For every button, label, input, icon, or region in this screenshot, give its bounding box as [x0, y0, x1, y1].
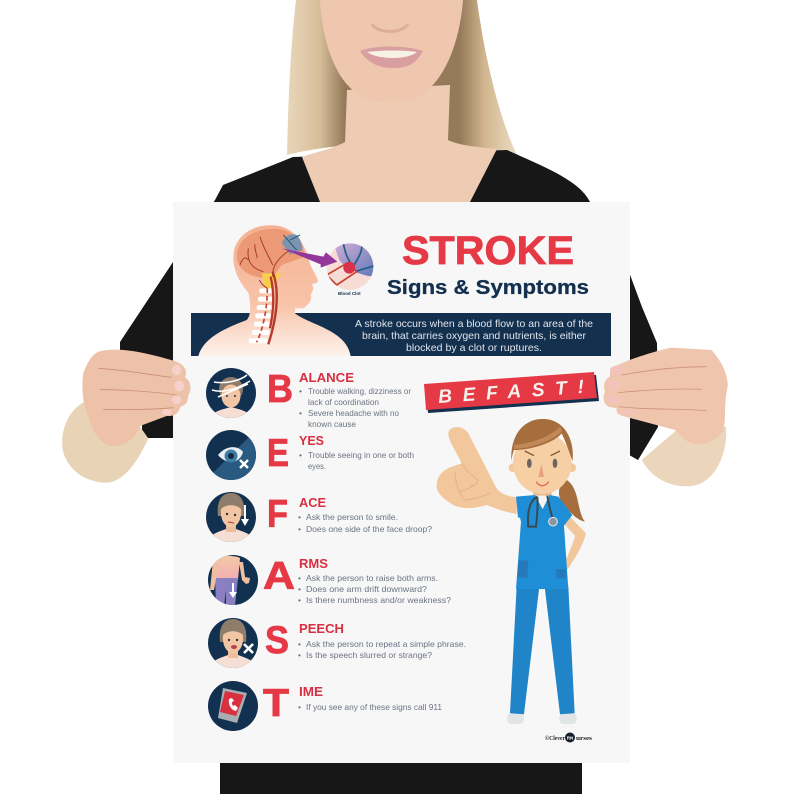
letter T: T [263, 682, 289, 725]
nose shadow [372, 24, 408, 32]
fingernails [162, 365, 184, 415]
letter S: S [265, 619, 289, 662]
brain stem [262, 273, 282, 288]
symptoms: Ask the person to smile. [306, 512, 398, 522]
symptoms: Is the speech slurred or strange? [306, 650, 432, 660]
icon: dizzy face [206, 368, 256, 418]
row: face [206, 492, 432, 542]
poster background [173, 202, 630, 763]
stethoscope [528, 496, 557, 527]
right hand [604, 348, 728, 486]
symptoms: Trouble seeing in one or both [308, 450, 414, 460]
row: eyes [206, 430, 414, 480]
symptoms: • [298, 512, 301, 522]
free arm [556, 515, 586, 571]
symptoms: • [299, 386, 302, 396]
symptoms [299, 450, 414, 471]
detail circle [327, 243, 377, 290]
forearm [642, 427, 726, 486]
clot label: Blood Clot [338, 291, 361, 296]
face [320, 0, 463, 102]
symptoms: Does one arm drift downward? [306, 584, 427, 594]
symptoms: If you see any of these signs call 911 [306, 702, 442, 712]
title: STROKE [402, 229, 574, 273]
fingernails [606, 366, 632, 415]
heading: ACE [299, 495, 326, 510]
icon: arm weakness [208, 555, 258, 606]
symptoms: • [298, 524, 301, 534]
heading: YES [299, 433, 324, 448]
neck [533, 490, 552, 502]
symptoms: • [298, 595, 301, 605]
row: time [208, 681, 442, 731]
symptoms: Ask the person to raise both arms. [306, 573, 438, 583]
heading: RMS [299, 556, 328, 571]
intro text [355, 318, 593, 354]
blocked brain area [282, 234, 303, 254]
intro text: A stroke occurs when a blood flow to an area of the [355, 318, 593, 330]
illustration: nurse pointing [437, 419, 586, 724]
symptoms [299, 386, 411, 429]
icon: phone [208, 681, 258, 731]
mouth [360, 46, 423, 68]
row: balance [206, 368, 411, 429]
banner face [424, 372, 597, 410]
intro text: brain, that carries oxygen and nutrients, is either [362, 330, 586, 342]
spinal cord [257, 288, 267, 342]
hand [82, 350, 191, 446]
symptoms: • [298, 573, 301, 583]
pockets [517, 560, 567, 578]
shoes [507, 713, 577, 724]
collar [535, 496, 549, 509]
symptoms: known cause [308, 419, 356, 429]
brain vessels [240, 237, 290, 288]
symptoms [298, 573, 451, 605]
symptoms: Trouble walking, dizziness or [308, 386, 411, 396]
icon: drooping face [206, 492, 256, 542]
symptoms [298, 639, 466, 660]
intro text: blocked by a clot or ruptures. [406, 342, 542, 354]
black shirt [120, 150, 658, 794]
symptoms: Severe headache with no [308, 408, 399, 418]
copyright: ©Clever [545, 735, 565, 742]
carotid artery [268, 272, 277, 344]
icon: eye [206, 430, 256, 480]
copyright [545, 732, 593, 742]
finger creases [98, 368, 177, 410]
arrow [282, 248, 337, 268]
letter F: F [267, 493, 288, 536]
blood clot [343, 262, 355, 274]
symptoms: • [299, 450, 302, 460]
photo: woman holding poster [120, 0, 658, 794]
symptoms: • [298, 584, 301, 594]
heading: PEECH [299, 621, 344, 636]
letter B: B [267, 368, 293, 411]
icon: slurred speech [208, 618, 258, 668]
row: arms [208, 555, 451, 606]
symptoms: • [299, 408, 302, 418]
brain [237, 229, 305, 278]
symptoms: Is there numbness and/or weakness? [306, 595, 451, 605]
trousers [510, 587, 575, 714]
symptoms: • [298, 650, 301, 660]
header banner [191, 313, 611, 356]
pointing arm and hand [437, 427, 517, 514]
symptoms [298, 512, 432, 534]
illustration: head with stroke [198, 225, 377, 356]
hair [287, 0, 517, 155]
letter A: A [263, 555, 295, 598]
symptoms: • [298, 702, 301, 712]
head and shoulders silhouette [198, 225, 351, 356]
neck and chest [302, 85, 497, 202]
symptoms: Does one side of the face droop? [306, 524, 432, 534]
scrub top [516, 495, 572, 589]
banner shadow [426, 375, 599, 413]
finger creases [618, 367, 707, 411]
forearm [62, 402, 148, 483]
callout: BE FAST banner [424, 372, 599, 413]
blocked vessels [283, 235, 300, 250]
subtitle: Signs & Symptoms [387, 277, 589, 299]
copyright: RN [567, 736, 573, 740]
banner text: BEFAST! [438, 377, 585, 408]
spine [249, 288, 273, 343]
letter E: E [267, 432, 289, 475]
row: speech [208, 618, 466, 668]
heading: IME [299, 684, 323, 699]
symptoms: eyes. [308, 461, 326, 471]
ponytail [559, 480, 585, 522]
hand [604, 348, 728, 444]
symptoms: • [298, 639, 301, 649]
copyright: urses [576, 736, 593, 742]
head [509, 419, 576, 494]
symptoms: lack of coordination [308, 397, 379, 407]
left hand [62, 350, 191, 483]
heading: ALANCE [299, 370, 354, 385]
symptoms: Ask the person to repeat a simple phrase. [306, 639, 466, 649]
